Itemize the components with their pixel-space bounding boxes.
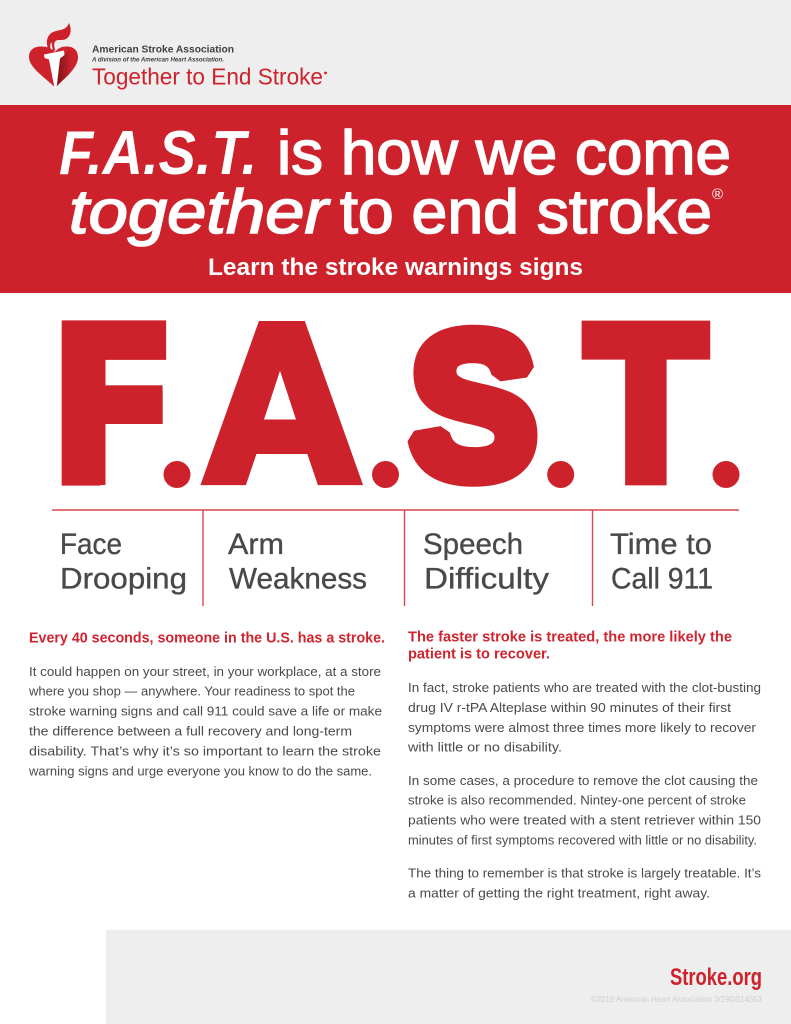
label: Arm Weakness: Arm (228, 528, 284, 561)
large F.A.S.T. letters: F (56, 282, 166, 525)
left paragraph: disability. That’s why it’s so important to learn the stroke (29, 744, 381, 759)
title line 1: F.A.S.T. (59, 119, 257, 188)
left paragraph: It could happen on your street, in your workplace, at a store (29, 664, 381, 679)
title line 2: together (69, 178, 331, 247)
left paragraph: warning signs and urge everyone you know to do the same. (28, 763, 372, 778)
right paragraph 1: In fact, stroke patients who are treated with the clot-busting (408, 680, 761, 695)
title line 1 (59, 119, 731, 188)
label: Speech Difficulty: Speech (423, 528, 523, 561)
right paragraph 2 (408, 773, 761, 847)
left column text (28, 631, 385, 778)
subtitle: Learn the stroke warnings signs (208, 254, 583, 281)
divider grid (52, 510, 739, 606)
right paragraph 3: a matter of getting the right treatment, right away. (408, 885, 710, 900)
logo wordmark: A division of the American Heart Association. (91, 58, 224, 64)
label: Face Drooping (60, 528, 187, 595)
right paragraph 1: with little or no disability. (407, 740, 562, 755)
footer panel (106, 930, 791, 1024)
left paragraph: stroke warning signs and call 911 could save a life or make (29, 704, 382, 719)
left paragraph: the difference between a full recovery and long-term (29, 724, 352, 739)
label: Time to Call 911 (610, 528, 713, 595)
label: Face Drooping: Drooping (60, 562, 187, 595)
logo wordmark: Together to End Stroke (92, 63, 323, 89)
label: Face Drooping: Face (60, 528, 122, 561)
title line 1: is how we come (277, 119, 731, 188)
left paragraph: where you shop — anywhere. Your readiness to spot the (28, 684, 355, 699)
logo wordmark: American Stroke Association (92, 44, 234, 56)
right paragraph 2: patients who were treated with a stent retriever within 150 (408, 812, 761, 827)
large F.A.S.T. letters (56, 280, 739, 525)
right paragraph 1: symptoms were almost three times more likely to recover (408, 720, 757, 735)
right heading (408, 630, 732, 662)
right column text (407, 630, 762, 900)
title line 2 (69, 178, 723, 247)
title line 2: ® (712, 186, 723, 203)
right paragraph 1 (407, 680, 761, 755)
title line 2: to end stroke (340, 178, 712, 247)
label: Arm Weakness (228, 528, 367, 595)
label: Arm Weakness: Weakness (229, 562, 367, 595)
label: Time to Call 911: Time to (610, 528, 712, 561)
right heading: patient is to recover. (408, 646, 550, 662)
copyright: ©2019 American Heart Association 3/19DS14553 (591, 994, 762, 1004)
right paragraph 2: In some cases, a procedure to remove the clot causing the (408, 773, 758, 788)
label: Speech Difficulty (423, 528, 549, 595)
logo wordmark (91, 44, 327, 89)
large F.A.S.T. letters: S (410, 292, 537, 519)
right paragraph 2: minutes of first symptoms recovered with little or no disability. (408, 832, 757, 847)
right paragraph 3 (408, 865, 762, 900)
large F.A.S.T. letters: A (205, 281, 359, 525)
label: Time to Call 911: Call 911 (611, 562, 713, 595)
icon: heart and torch logo (29, 23, 78, 88)
right heading: The faster stroke is treated, the more likely the (408, 630, 732, 646)
right paragraph 1: drug IV r-tPA Alteplase within 90 minutes of their first (408, 700, 731, 715)
header band with logo (0, 0, 791, 105)
title banner (0, 105, 791, 293)
large F.A.S.T. letters: T (586, 280, 706, 524)
left paragraph (28, 664, 382, 778)
label: Speech Difficulty: Difficulty (424, 562, 549, 595)
right paragraph 3: The thing to remember is that stroke is largely treatable. It’s (408, 865, 762, 880)
left heading: Every 40 seconds, someone in the U.S. has a stroke. (29, 631, 385, 647)
Stroke.org wordmark: Stroke.org (670, 964, 762, 991)
right paragraph 2: stroke is also recommended. Nintey-one percent of stroke (408, 793, 746, 808)
